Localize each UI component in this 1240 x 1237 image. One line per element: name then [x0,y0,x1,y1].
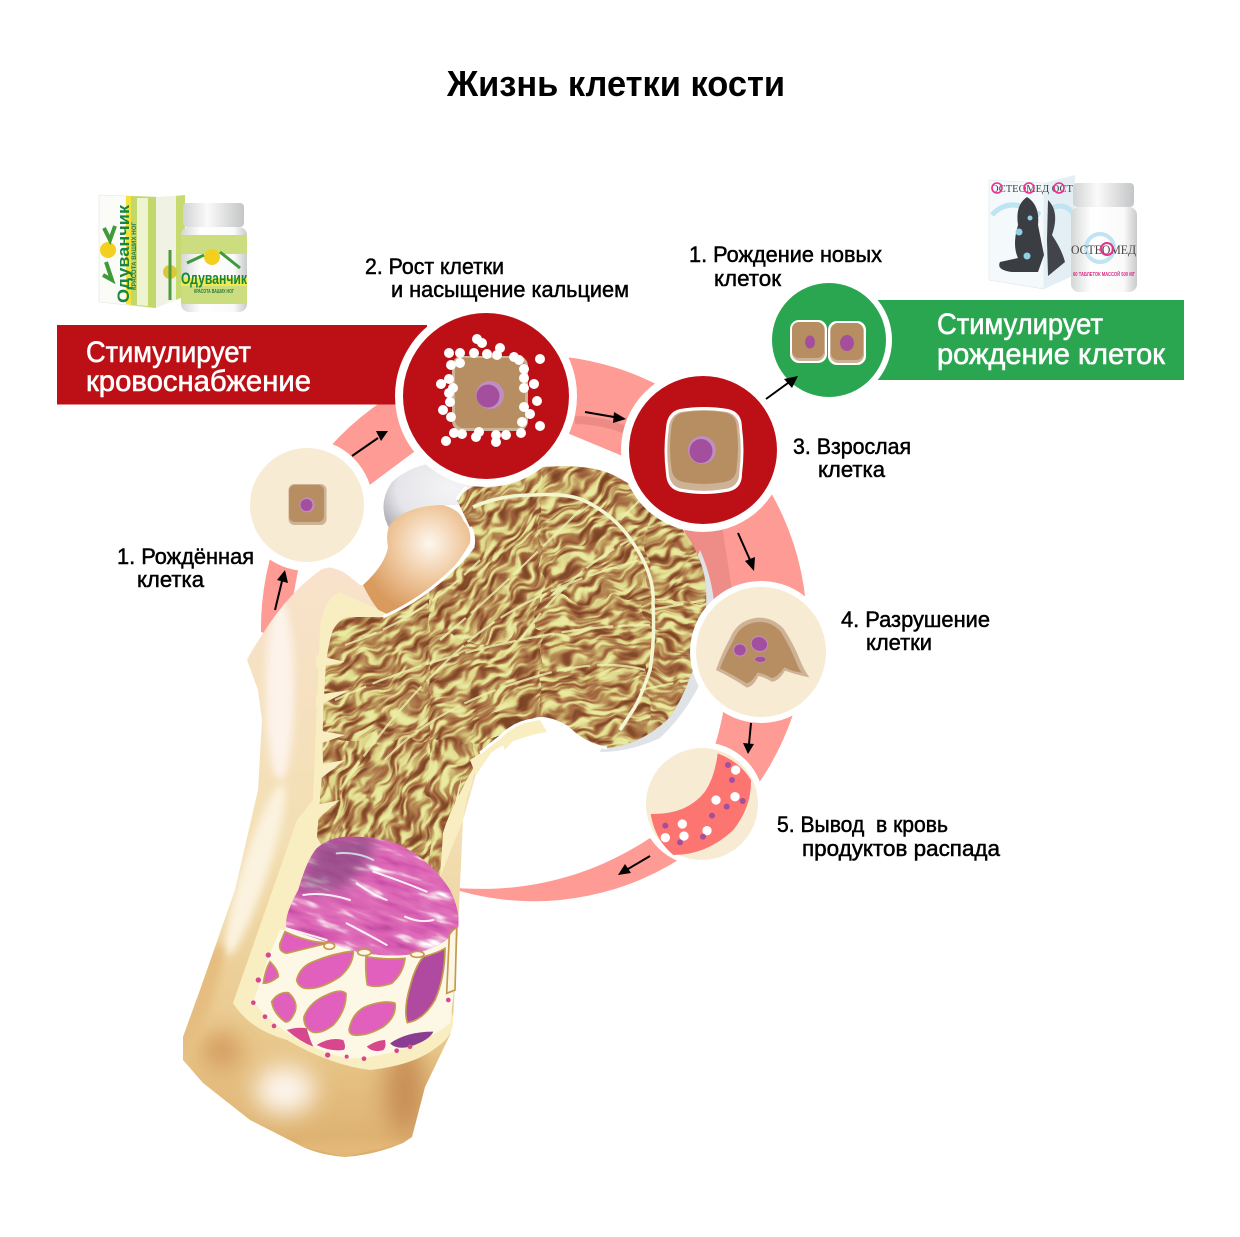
arrow 3 to birth of new cells [766,376,798,399]
banner: stimulates cell birth: рождение клеток [937,338,1166,371]
label 4 destruction [841,607,990,655]
jar [183,203,244,227]
white streaks on dome [287,853,433,945]
arrow 1 to 2 [352,431,388,456]
product: osteomed package [989,175,1137,292]
product: dandelion package [99,195,247,312]
banner: stimulates blood supply: кровоснабжение [86,365,311,398]
marrow dome [286,836,459,956]
circle 1: newborn cell [241,439,373,571]
product: dandelion package: Одуванчик [114,204,133,303]
jar [1073,183,1134,207]
bone shading and highlights [168,600,425,1160]
label 4 destruction: 4. Разрушение [841,607,990,632]
label birth of new cells: 1. Рождение новых [689,242,882,267]
calcium dots [436,334,545,447]
marrow fragments along the rim [251,952,451,1061]
circle 3: mature cell [621,368,785,532]
label birth of new cells: клеток [714,266,781,291]
warped trabecular texture sectors [317,466,706,875]
spongy trabecular bone [317,466,706,875]
arrow 2 to 3 [585,412,626,423]
product: osteomed package: 60 ТАБЛЕТОК МАССОЙ 500 МГ [1073,270,1136,278]
banner: stimulates cell birth [877,300,1184,380]
spongy outline [383,487,607,753]
label 1 newborn cell [117,544,254,592]
product: osteomed package: ОСТЕОМЕД ОСТ [991,184,1073,195]
label 3 mature cell: 3. Взрослая [793,434,911,459]
bone marrow lattice [251,836,459,1061]
femoral head ball [363,505,470,615]
label 2 growth: и насыщение кальцием [391,277,629,302]
carton [99,195,156,308]
label birth of new cells [689,242,882,291]
label 5 removal: продуктов распада [802,836,1001,861]
label 5 removal [777,812,1001,861]
title: Жизнь клетки кости [446,63,785,104]
label 1 newborn cell: клетка [137,567,205,592]
label 5 removal: 5. Вывод в кровь [777,812,948,837]
femoral head gray cartilage [383,462,480,530]
product: dandelion package: КРАСОТА ВАШИХ НОГ [132,221,138,290]
arrow 3 to 4 [738,533,755,571]
banner: stimulates blood supply [57,325,427,404]
label 2 growth [365,254,629,302]
marrow cells [263,932,445,1035]
lattice knobs [324,928,457,993]
banner: stimulates blood supply: Стимулирует [86,336,251,369]
label 3 mature cell: клетка [818,457,886,482]
product: dandelion package: КРАСОТА ВАШИХ НОГ [194,289,234,295]
label 4 destruction: клетки [866,630,932,655]
product: osteomed package: ОСТЕОМЕД [1071,242,1136,257]
carton [989,180,1044,289]
arrow 4 to 5 [743,723,754,754]
circle 5: decay products into blood [640,742,764,866]
arrow 1 up [275,570,288,610]
bone shaft outer surface [183,567,480,1157]
circle 2: growth with calcium [395,305,577,487]
circle 4: cell destruction [690,581,832,723]
silhouettes [999,197,1044,272]
cut surface of the bone [233,592,547,1070]
label 3 mature cell [793,434,911,482]
product: dandelion package: Одуванчик [181,269,247,288]
pale arc line inside the head [473,495,654,730]
banner: stimulates cell birth: Стимулирует [937,308,1103,341]
trabecular lines [335,480,705,790]
lattice base [253,930,457,1058]
circular arrow band of the cell cycle [261,355,807,901]
circle: newborn cells (green) [766,277,892,403]
gray rim of the head [600,550,715,752]
label 2 growth: 2. Рост клетки [365,254,504,279]
cream scallops on the left and lower edge of the spongy bone [314,655,530,838]
label 1 newborn cell: 1. Рождённая [117,544,254,569]
arrow 5 to bone [618,856,650,875]
bone illustration [183,466,706,1157]
